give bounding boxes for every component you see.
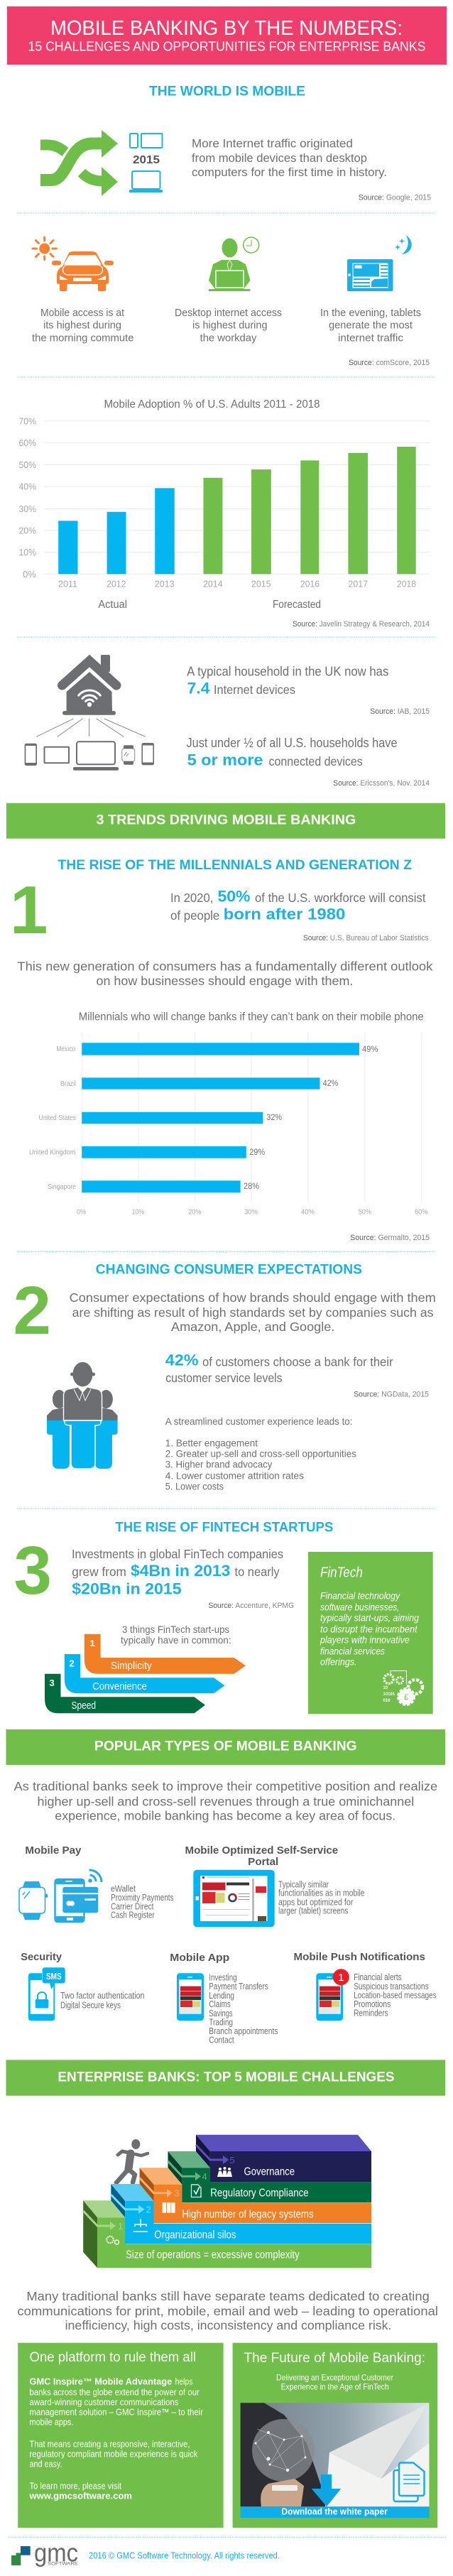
stat: fintech investment: Investments in global FinTech companies xyxy=(72,1547,283,1561)
text: separate teams: inefficiency, high costs, inconsistency and compliance risk. xyxy=(65,2318,391,2332)
text: new generation xyxy=(17,960,433,988)
icon: tablet portal xyxy=(193,1870,275,1927)
panel: one platform: regulatory compliant mobile experience is quick xyxy=(30,2450,198,2460)
bar chart: millennials changing banks: 10% xyxy=(132,1208,144,1216)
logo: gmc software: SOFTWARE xyxy=(48,2561,79,2567)
stat: fintech investment xyxy=(72,1547,283,1597)
stat: US households: 5 or more xyxy=(187,751,263,769)
panel: fintech definition: typically start-ups, aiming xyxy=(320,1612,419,1624)
stat: workforce xyxy=(170,888,426,923)
panel: one platform: award-winning customer communications xyxy=(30,2398,179,2408)
text: workday: the workday xyxy=(200,332,257,344)
icon: shuffle arrows xyxy=(40,130,118,196)
panel: fintech definition: players with innovative xyxy=(320,1634,410,1646)
banner: popular types xyxy=(6,1729,445,1765)
icon: phone and card xyxy=(54,1870,102,1923)
panel: one platform: helps xyxy=(175,2377,193,2387)
step 3: legacy systems: High number of legacy systems xyxy=(182,2208,314,2220)
source: ericsson: Source: Ericsson's, Nov. 2014 xyxy=(333,779,430,788)
column chart: mobile adoption xyxy=(18,398,430,611)
column chart: mobile adoption: 20% xyxy=(18,526,36,536)
text: morning commute: its highest during xyxy=(43,320,121,332)
block: mobile pay: Carrier Direct xyxy=(111,1902,154,1912)
stat: 42 percent: of customers choose a bank for their xyxy=(202,1354,393,1369)
text: 3 things: 3 things FinTech start-ups xyxy=(122,1624,229,1635)
icon: tablet and moon xyxy=(347,235,412,291)
block: self-service portal: larger (tablet) screens xyxy=(278,1906,348,1915)
icon: watch xyxy=(19,1881,48,1920)
block: push notifications: Mobile Push Notifications xyxy=(294,1951,425,1963)
stat: workforce: of people xyxy=(170,908,219,923)
step 2: organizational silos: Organizational silos xyxy=(154,2229,236,2241)
source: IAB: Source: IAB, 2015 xyxy=(370,707,430,716)
text: consumer expectations: are shifting as result of high standards set by companies such as xyxy=(72,1305,434,1320)
icon: customers group xyxy=(47,1362,118,1469)
stat: fintech investment: to nearly xyxy=(234,1565,280,1579)
title banner: 15 CHALLENGES AND OPPORTUNITIES FOR ENTERPRISE BANKS xyxy=(28,40,426,54)
block: mobile app: Mobile App xyxy=(170,1952,229,1964)
stat: UK households: A typical household in the UK now has xyxy=(187,664,388,678)
block: security: Two factor authentication xyxy=(60,1991,145,2001)
bar chart: millennials changing banks: 28% xyxy=(244,1181,259,1191)
column chart: mobile adoption: 2012 xyxy=(107,579,126,589)
text: 3 things: typically have in common: xyxy=(121,1634,231,1646)
block: push notifications: Suspicious transactions xyxy=(354,1982,429,1991)
stat: UK households: Internet devices xyxy=(214,683,295,697)
icon: fintech gears xyxy=(383,1670,422,1705)
icon: app phone xyxy=(177,1973,204,2021)
icon: phone sms: SMS xyxy=(46,1972,62,1982)
text: traditional banks xyxy=(14,1779,437,1822)
list: streamlined experience xyxy=(165,1415,356,1492)
step 2: convenience: 2 xyxy=(70,1658,75,1669)
panel: fintech definition: to disrupt the incumbent xyxy=(320,1624,418,1635)
icon: desktop worker xyxy=(209,237,259,291)
icon: push phone xyxy=(316,1969,349,2021)
text: workday xyxy=(175,307,282,344)
bar chart: millennials changing banks: 30% xyxy=(244,1208,258,1216)
text: consumer expectations xyxy=(70,1290,436,1334)
source: comscore: Source: comScore, 2015 xyxy=(349,359,430,367)
block: push notifications: Promotions xyxy=(354,1999,391,2009)
stat: 42 percent: customer service levels xyxy=(165,1371,283,1385)
icon: fintech gears: £ xyxy=(404,1693,408,1702)
banner: top 5 challenges xyxy=(6,2060,445,2096)
block: self-service portal: Typically similar xyxy=(278,1879,329,1889)
stat: fintech investment: $4Bn in 2013 xyxy=(131,1562,230,1580)
column chart: mobile adoption: 60% xyxy=(18,438,36,448)
column chart: mobile adoption: 50% xyxy=(18,460,36,470)
column chart: mobile adoption: 2016 xyxy=(300,579,320,589)
chart title: Mobile Adoption % of U.S. Adults 2011 - 2018 xyxy=(104,398,320,411)
button: download: Download the white paper xyxy=(281,2507,388,2517)
step 3: legacy systems: 3 xyxy=(174,2188,179,2199)
panel: one platform: To learn more, please visit xyxy=(30,2482,121,2491)
text: consumer expectations: Amazon, Apple, and Google. xyxy=(171,1320,334,1334)
numeral 3: 3 xyxy=(14,1533,52,1609)
step 3: legacy systems xyxy=(140,2168,371,2223)
icon: devices 2015 xyxy=(129,134,163,192)
step 2: organizational silos: 2 xyxy=(146,2205,151,2214)
icon: car and sun xyxy=(33,237,114,291)
text: morning commute: Mobile access is at xyxy=(40,307,125,319)
title banner: MOBILE BANKING BY THE NUMBERS: xyxy=(50,17,403,40)
bar chart: millennials changing banks xyxy=(29,1011,427,1216)
step 1: simplicity: Simplicity xyxy=(111,1661,152,1672)
stat: fintech investment: grew from xyxy=(72,1565,126,1579)
step 1: simplicity xyxy=(84,1634,246,1674)
banner: top 5 challenges: ENTERPRISE BANKS: TOP 5 MOBILE CHALLENGES xyxy=(58,2070,395,2085)
text: traditional banks: As traditional banks seek to improve their competitive position and realize xyxy=(14,1779,437,1793)
source: accenture: Source: Accenture, KPMG xyxy=(208,1602,294,1610)
step 4: regulatory compliance: 4 xyxy=(202,2171,207,2182)
column chart: mobile adoption: 10% xyxy=(18,548,36,558)
heading: fintech startups: THE RISE OF FINTECH STARTUPS xyxy=(115,1521,333,1536)
step 1: simplicity: 1 xyxy=(89,1638,95,1648)
icon: phone sms xyxy=(28,1967,65,2021)
column chart: mobile adoption: 2011 xyxy=(58,579,77,589)
text: evening tablets: internet traffic xyxy=(338,332,403,344)
label: forecasted: Forecasted xyxy=(273,599,321,611)
block: mobile app: Claims xyxy=(209,1999,231,2009)
bar chart: millennials changing banks: United Kingdom xyxy=(29,1148,76,1156)
block: self-service portal: Portal xyxy=(248,1856,278,1868)
logo: gmc software: gmc xyxy=(34,2538,78,2567)
image: white paper cover xyxy=(241,2403,429,2506)
text: separate teams: Many traditional banks still have separate teams dedicated to creating xyxy=(26,2289,430,2303)
bar chart: millennials changing banks: 32% xyxy=(266,1112,282,1122)
panel: fintech definition: software businesses, xyxy=(320,1602,399,1613)
panel: future of mobile banking xyxy=(233,2343,437,2528)
column chart: mobile adoption: 2015 xyxy=(251,579,271,589)
heading: the world is mobile: THE WORLD IS MOBILE xyxy=(149,85,305,99)
panel: future of mobile banking: Delivering an Exceptional Customer xyxy=(276,2373,393,2383)
panel: one platform: GMC Inspire™ Mobile Advantage xyxy=(30,2377,172,2387)
block: security: Security xyxy=(21,1951,62,1963)
step 4: regulatory compliance: Regulatory Compliance xyxy=(210,2187,309,2199)
block: self-service portal: Mobile Optimized Self-Service xyxy=(185,1844,338,1857)
list: streamlined experience: 1. Better engagement xyxy=(165,1438,258,1449)
icon: connected house and devices xyxy=(25,655,154,771)
panel: fintech definition: offerings. xyxy=(320,1656,357,1668)
step 5: governance: 5 xyxy=(230,2155,235,2165)
column chart: mobile adoption: 2017 xyxy=(348,579,368,589)
banner: popular types: POPULAR TYPES OF MOBILE BANKING xyxy=(94,1739,357,1754)
block: mobile app: Lending xyxy=(209,1991,234,2001)
block: mobile app xyxy=(170,1952,278,2045)
stat: US households: Just under ½ of all U.S. households have xyxy=(186,736,398,750)
bar chart: millennials changing banks: 42% xyxy=(323,1078,338,1088)
panel: one platform: mobile apps. xyxy=(30,2418,73,2428)
icon: push phone: 1 xyxy=(338,1972,344,1984)
block: mobile pay xyxy=(19,1844,174,1923)
step arrows: simplicity convenience speed xyxy=(45,1634,246,1713)
text: workday: is highest during xyxy=(192,320,267,332)
banner: 3 trends xyxy=(6,803,445,839)
numeral 1: 1 xyxy=(10,872,48,948)
column chart: mobile adoption: 30% xyxy=(18,504,36,514)
step 1: size of operations xyxy=(83,2200,371,2268)
panel: one platform: management solution – GMC Inspire™ – to their xyxy=(30,2408,203,2418)
column chart: mobile adoption: 2013 xyxy=(155,579,175,589)
title banner xyxy=(7,6,447,65)
stat: 42 percent xyxy=(165,1352,393,1385)
block: mobile app: Contact xyxy=(209,2036,234,2045)
step 1: size of operations: 1 xyxy=(118,2221,123,2232)
bar chart: millennials changing banks: United States xyxy=(38,1114,76,1122)
column chart: mobile adoption: 70% xyxy=(18,416,36,426)
stat: UK households: 7.4 xyxy=(187,680,210,697)
panel: one platform: banks across the globe extend the power of our xyxy=(30,2388,200,2398)
panel: fintech definition: Financial technology xyxy=(320,1590,400,1602)
panel: one platform: That means creating a responsive, interactive, xyxy=(30,2440,190,2450)
list: streamlined experience: 5. Lower costs xyxy=(165,1481,224,1492)
block: mobile pay: Cash Register xyxy=(111,1911,155,1920)
list: streamlined experience: 3. Higher brand advocacy xyxy=(165,1459,272,1470)
icon: devices 2015: 2015 xyxy=(133,154,160,166)
step 2: organizational silos xyxy=(111,2184,371,2244)
bar chart: millennials changing banks: 50% xyxy=(359,1208,371,1216)
text: evening tablets xyxy=(320,307,421,344)
step 1: size of operations: Size of operations = excessive complexity xyxy=(126,2249,300,2261)
panel: future of mobile banking: Experience in the Age of FinTech xyxy=(281,2382,389,2392)
step 3: speed: 3 xyxy=(50,1678,55,1688)
text: new generation: on how businesses should engage with them. xyxy=(97,974,353,988)
stat: fintech investment: $20Bn in 2015 xyxy=(72,1580,182,1597)
stat: US households: connected devices xyxy=(268,754,363,768)
block: self-service portal: apps but optimized for xyxy=(278,1897,353,1907)
text: separate teams: communications for print, mobile, email and web – leading to operational xyxy=(17,2304,438,2318)
bar chart: millennials changing banks: 49% xyxy=(362,1044,378,1054)
block: security xyxy=(21,1951,145,2021)
text: evening tablets: In the evening, tablets xyxy=(320,307,421,319)
block: self-service portal: functionalities as in mobile xyxy=(278,1888,365,1898)
text: new generation: This new generation of consumers has a fundamentally different outlook xyxy=(17,960,433,974)
source: ngdata: Source: NGData, 2015 xyxy=(354,1391,429,1399)
stat: workforce: 50% xyxy=(217,888,250,906)
stat: workforce: born after 1980 xyxy=(224,906,345,923)
icon: fintech gears: 010 xyxy=(383,1699,391,1703)
panel: one platform: www.gmcsoftware.com xyxy=(28,2491,132,2501)
heading: changing expectations: CHANGING CONSUMER EXPECTATIONS xyxy=(96,1263,362,1278)
source: google: Source: Google, 2015 xyxy=(359,194,431,202)
panel: one platform: and easy. xyxy=(30,2460,62,2469)
list: streamlined experience: 2. Greater up-sell and cross-sell opportunities xyxy=(165,1448,356,1460)
block: security: Digital Secure keys xyxy=(60,2000,121,2010)
bar chart: millennials changing banks: Brazil xyxy=(60,1080,76,1088)
block: self-service portal xyxy=(185,1844,365,1927)
column chart: mobile adoption: 0% xyxy=(23,570,36,580)
block: mobile app: Savings xyxy=(209,2009,233,2018)
step 5: governance: Governance xyxy=(244,2165,295,2178)
chart title: Millennials who will change banks if they can’t bank on their mobile phone xyxy=(79,1011,424,1023)
text: internet traffic: from mobile devices than desktop xyxy=(192,151,367,165)
text: 3 things xyxy=(121,1624,231,1646)
bar chart: millennials changing banks: 20% xyxy=(188,1208,201,1216)
block: mobile app: Trading xyxy=(209,2018,233,2028)
staircase: 5 challenges xyxy=(83,2135,371,2268)
numeral 2: 2 xyxy=(13,1273,51,1349)
stat: UK households xyxy=(187,664,388,697)
panel: future of mobile banking: The Future of Mobile Banking: xyxy=(244,2350,425,2366)
label: actual: Actual xyxy=(98,599,127,611)
block: mobile app: Payment Transfers xyxy=(209,1982,268,1991)
source: javelin: Source: Javelin Strategy & Research, 2014 xyxy=(293,620,430,629)
text: traditional banks: higher up-sell and cross-sell revenues through a true ominichannel xyxy=(37,1794,414,1808)
panel: fintech definition xyxy=(308,1552,433,1714)
block: mobile pay: Proximity Payments xyxy=(111,1893,174,1903)
stat: workforce: of the U.S. workforce will consist xyxy=(255,891,426,905)
step 4: regulatory compliance xyxy=(168,2151,371,2202)
source: BLS: Source: U.S. Bureau of Labor Statistics xyxy=(303,934,429,942)
block: mobile pay: Mobile Pay xyxy=(25,1844,82,1857)
step 5: governance xyxy=(196,2135,371,2182)
logo: gmc software xyxy=(11,2538,79,2567)
text: internet traffic xyxy=(192,136,387,179)
text: traditional banks: experience, mobile banking has become a key area of focus. xyxy=(55,1808,395,1822)
text: separate teams xyxy=(17,2289,438,2332)
banner: 3 trends: 3 TRENDS DRIVING MOBILE BANKING xyxy=(97,813,356,828)
bar chart: millennials changing banks: Singapore xyxy=(48,1183,76,1191)
icon: climbing man xyxy=(116,2139,148,2183)
bar chart: millennials changing banks: 29% xyxy=(249,1147,265,1157)
list: streamlined experience: A streamlined customer experience leads to: xyxy=(165,1415,353,1427)
text: morning commute xyxy=(32,307,133,344)
text: workday: Desktop internet access xyxy=(175,307,282,319)
block: push notifications: Reminders xyxy=(354,2009,388,2018)
bar chart: millennials changing banks: 60% xyxy=(415,1208,427,1216)
icon: fintech gears: 10 xyxy=(383,1686,388,1690)
block: push notifications: Financial alerts xyxy=(354,1972,402,1982)
icon: fintech gears: 10101 xyxy=(383,1692,395,1697)
bar chart: millennials changing banks: Mexico xyxy=(56,1045,75,1053)
text: internet traffic: More Internet traffic originated xyxy=(192,136,353,150)
block: mobile app: Branch appointments xyxy=(209,2026,278,2036)
source: gemalto: Source: Germalto, 2015 xyxy=(350,1234,430,1242)
text: evening tablets: generate the most xyxy=(329,320,413,332)
bar chart: millennials changing banks: 40% xyxy=(301,1208,315,1216)
text: morning commute: the morning commute xyxy=(32,332,133,344)
panel: one platform xyxy=(18,2343,224,2528)
block: mobile pay: eWallet xyxy=(111,1884,136,1893)
button: download xyxy=(241,2506,429,2518)
text: consumer expectations: Consumer expectations of how brands should engage with them xyxy=(70,1290,436,1305)
bar chart: millennials changing banks: 0% xyxy=(77,1208,86,1216)
panel: fintech definition: FinTech xyxy=(320,1565,363,1581)
heading: millennials: THE RISE OF THE MILLENNIALS AND GENERATION Z xyxy=(58,858,412,873)
text: internet traffic: computers for the first time in history. xyxy=(192,165,387,179)
column chart: mobile adoption: 2014 xyxy=(203,579,223,589)
step 3: speed xyxy=(45,1674,205,1713)
panel: one platform: One platform to rule them all xyxy=(30,2350,196,2365)
stat: US households xyxy=(186,736,398,769)
stat: workforce: In 2020, xyxy=(170,891,213,905)
step 2: convenience: Convenience xyxy=(92,1681,147,1692)
panel: fintech definition: financial services xyxy=(320,1646,385,1657)
step 3: speed: Speed xyxy=(71,1700,96,1712)
block: push notifications xyxy=(294,1951,437,2021)
footer copyright: 2016 © GMC Software Technology. All rights reserved. xyxy=(89,2550,280,2561)
stat: 42 percent: 42% xyxy=(165,1352,199,1369)
list: streamlined experience: 4. Lower customer attrition rates xyxy=(165,1470,304,1482)
column chart: mobile adoption: 40% xyxy=(18,482,36,492)
column chart: mobile adoption: 2018 xyxy=(397,579,416,589)
step 2: convenience xyxy=(65,1654,225,1693)
block: mobile app: Investing xyxy=(209,1972,237,1982)
